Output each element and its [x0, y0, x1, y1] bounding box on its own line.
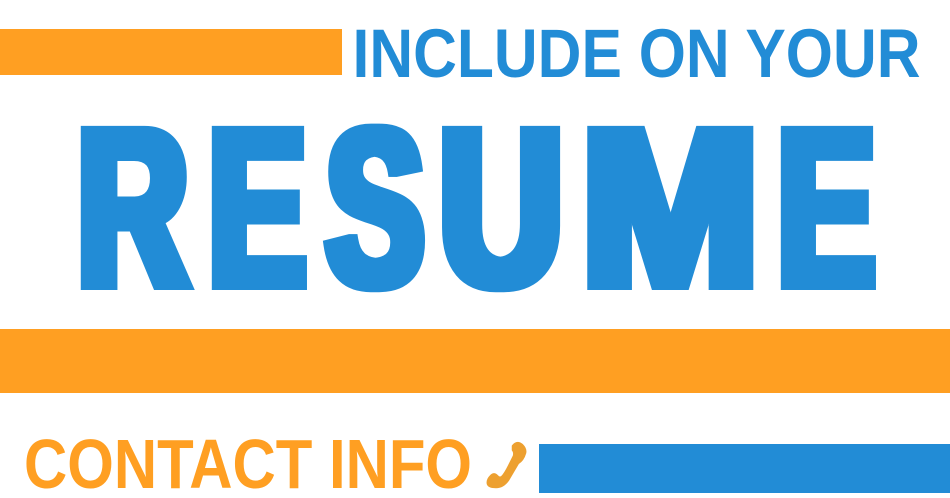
- top orange bar: [0, 29, 342, 75]
- title: resume: M: [582, 83, 759, 333]
- title: resume: U: [440, 83, 563, 333]
- icon: telephone handset: [488, 443, 525, 487]
- bottom blue bar: [539, 444, 950, 493]
- title: resume: R: [78, 83, 188, 333]
- title: resume: E: [778, 83, 874, 333]
- title: resume: [78, 83, 874, 333]
- title: resume: S: [327, 83, 424, 333]
- middle orange band: [0, 329, 950, 393]
- title: resume: E: [209, 83, 305, 333]
